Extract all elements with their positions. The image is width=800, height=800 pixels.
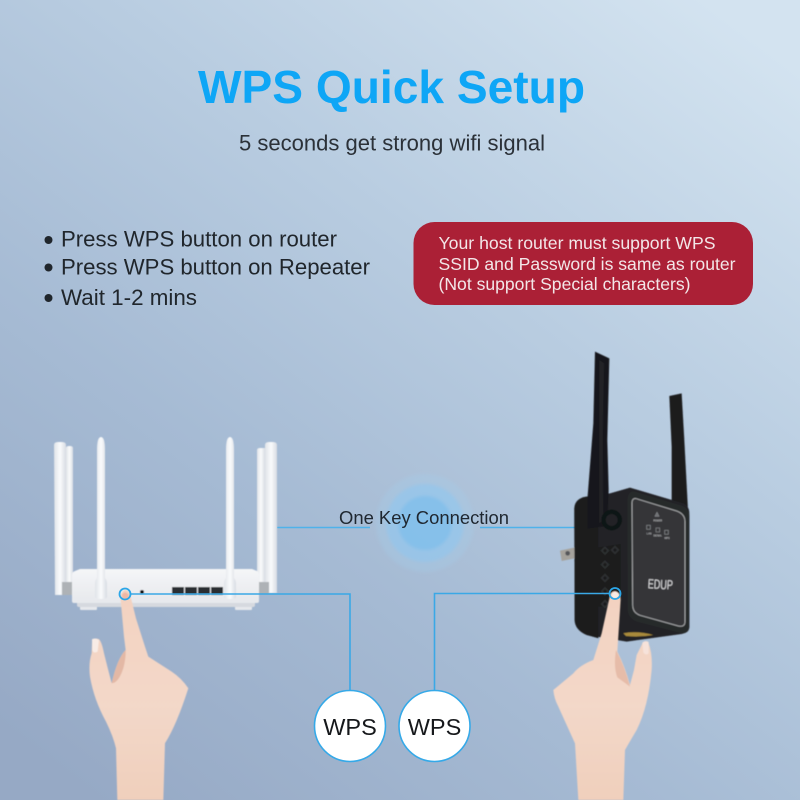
indicator lights	[647, 512, 668, 534]
fingertip nail	[122, 592, 129, 599]
step 3: Wait 1-2 mins	[61, 285, 197, 310]
router WPS ring	[120, 588, 130, 600]
router base	[77, 602, 255, 607]
connection lines	[277, 526, 575, 528]
left antenna	[587, 352, 609, 529]
callout: router requirements: (Not support Special characters)	[438, 274, 690, 294]
thumb nail	[92, 638, 99, 653]
left hand	[89, 590, 188, 800]
router body	[72, 569, 259, 603]
callout: router requirements	[414, 222, 753, 305]
side shading	[574, 495, 598, 638]
indicator labels: LAN	[647, 532, 652, 535]
outer right antennas	[257, 442, 277, 594]
step 1: Press WPS button on router	[61, 226, 337, 252]
inner left antenna	[95, 437, 107, 599]
front face bezel	[627, 491, 689, 633]
WPS badge: repeater	[399, 690, 470, 762]
reset button	[140, 590, 144, 594]
step 2: Press WPS button on Repeater	[61, 254, 370, 280]
right hand	[553, 591, 652, 800]
fingertip nail	[612, 592, 619, 598]
callout: router requirements: Your host router must support WPS	[438, 233, 716, 253]
indicator labels: SIGNAL	[653, 535, 663, 538]
indicator labels	[647, 521, 670, 540]
outer left antennas	[54, 442, 73, 595]
thumb crease	[615, 650, 630, 687]
WPS badge: router	[314, 690, 386, 762]
router callout line	[131, 594, 350, 690]
router feet	[80, 606, 252, 610]
antenna knob	[601, 510, 622, 530]
callout: router requirements: SSID and Password is same as router	[438, 254, 736, 274]
front panel	[632, 499, 685, 626]
label: one key connection: One Key Connection	[339, 507, 509, 528]
ethernet ports	[172, 587, 223, 595]
thumb nail	[642, 641, 649, 655]
indicator labels: WPS	[664, 538, 670, 540]
vent panel	[598, 544, 621, 607]
indicator labels: POWER	[653, 521, 662, 523]
subtitle: 5 seconds get strong wifi signal	[239, 130, 545, 156]
repeater WPS ring	[610, 588, 620, 599]
steps list	[44, 226, 370, 310]
thumb crease	[112, 650, 126, 683]
router illustration	[54, 437, 277, 610]
inner right antenna	[224, 437, 236, 599]
connection glow	[376, 474, 474, 572]
repeater casing	[574, 488, 689, 642]
right antenna	[669, 393, 688, 510]
WPS badge: repeater: WPS	[408, 714, 461, 740]
repeater illustration	[560, 352, 689, 642]
brand logo: EDUP	[647, 576, 673, 593]
plug pin	[560, 547, 575, 561]
repeater callout line	[434, 594, 609, 690]
bottom port glow	[623, 632, 653, 636]
WPS badge: router: WPS	[323, 714, 377, 740]
title: WPS Quick Setup	[198, 61, 585, 113]
